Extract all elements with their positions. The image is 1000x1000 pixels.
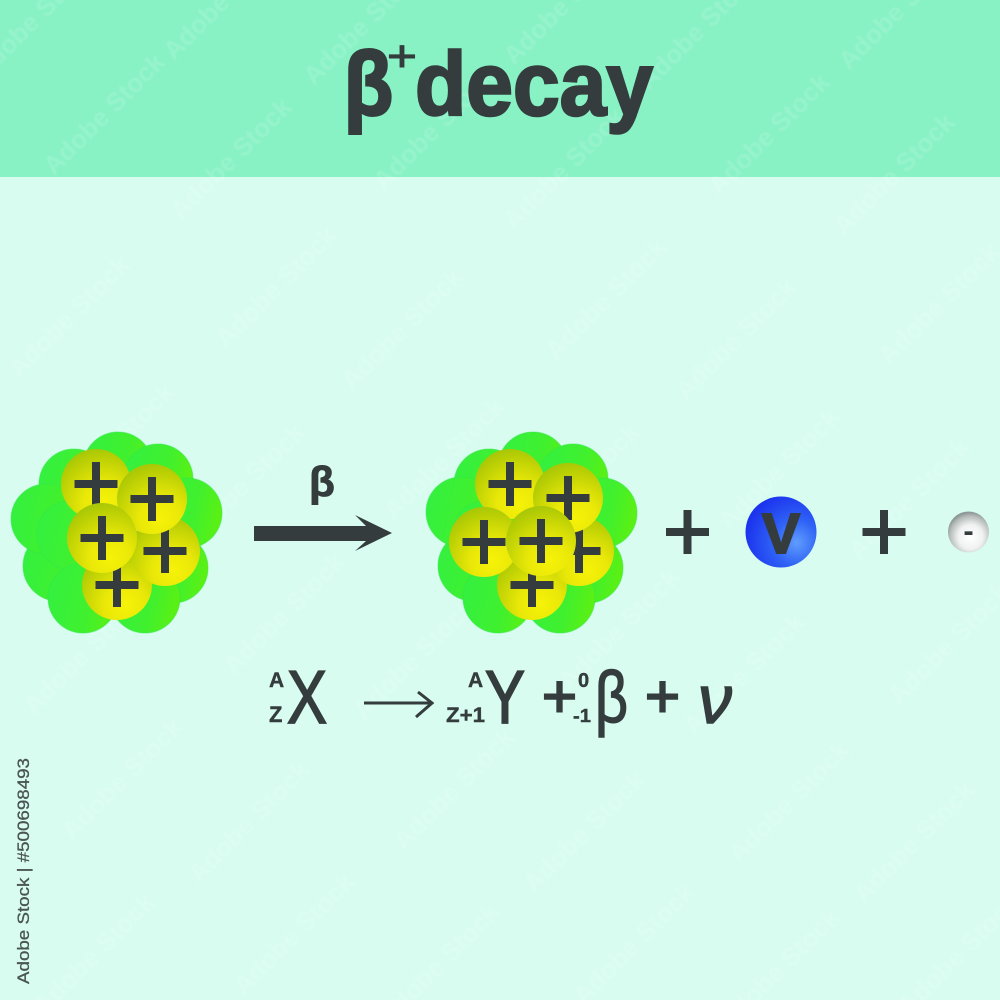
decay equation xyxy=(269,655,732,739)
equation plus 2: + xyxy=(645,663,680,730)
watermarks: Adobe Stock xyxy=(217,546,351,680)
parent atomic number: Z xyxy=(269,702,282,727)
beta charge number: -1 xyxy=(573,706,591,726)
reaction arrow xyxy=(254,515,392,551)
stock id label: Adobe Stock | #500698493 xyxy=(14,758,33,984)
beta symbol: β xyxy=(595,658,628,738)
nucleus: daughter xyxy=(426,432,637,633)
watermarks: Adobe Stock xyxy=(377,391,511,525)
nucleus: parent xyxy=(11,432,222,633)
watermarks: Adobe Stock xyxy=(677,606,811,740)
plus sign 2 xyxy=(862,510,906,554)
beta mass number: 0 xyxy=(578,670,589,692)
title: β xyxy=(344,35,393,135)
equation plus 1: + xyxy=(542,663,577,730)
title: + xyxy=(387,32,417,81)
watermarks: Adobe Stock xyxy=(164,91,298,225)
parent symbol X: X xyxy=(287,655,327,739)
watermarks: Adobe Stock xyxy=(712,401,846,535)
watermarks: Adobe Stock xyxy=(497,101,631,235)
neutrino symbol: ν xyxy=(698,662,732,738)
watermarks: Adobe Stock xyxy=(387,721,521,855)
watermarks: Adobe Stock xyxy=(517,764,651,898)
neutrino particle xyxy=(746,496,816,568)
watermarks: Adobe Stock xyxy=(227,866,361,1000)
positron particle xyxy=(948,512,989,552)
watermarks: Adobe Stock xyxy=(512,416,646,550)
title: decay xyxy=(415,35,653,135)
plus sign 1 xyxy=(666,510,709,554)
watermarks: Adobe Stock xyxy=(722,734,856,868)
watermarks: Adobe Stock xyxy=(847,774,981,908)
watermarks: Adobe Stock xyxy=(182,754,316,888)
watermarks: Adobe Stock xyxy=(669,271,803,405)
watermarks: Adobe Stock xyxy=(552,561,686,695)
beta label: β xyxy=(309,458,335,505)
watermarks: Adobe Stock xyxy=(2,249,136,383)
watermarks: Adobe Stock xyxy=(37,46,171,180)
equation arrow xyxy=(364,692,432,717)
watermarks: Adobe Stock xyxy=(702,66,836,200)
watermarks: Adobe Stock xyxy=(367,61,501,195)
watermarks: Adobe Stock xyxy=(842,431,976,565)
watermarks: Adobe Stock xyxy=(209,219,343,353)
watermarks: Adobe Stock xyxy=(539,231,673,365)
daughter mass number: A xyxy=(468,669,483,692)
watermarks: Adobe Stock xyxy=(827,106,961,240)
watermarks: Adobe Stock xyxy=(347,591,481,725)
daughter symbol Y: Y xyxy=(485,655,525,739)
watermarks: Adobe Stock xyxy=(335,261,469,395)
daughter atomic number: Z+1 xyxy=(446,704,485,727)
neutrino particle: V xyxy=(762,502,800,566)
watermarks: Adobe Stock xyxy=(177,416,311,550)
positron particle: - xyxy=(963,513,974,548)
watermarks: Adobe Stock xyxy=(55,711,189,845)
watermarks: Adobe Stock xyxy=(47,376,181,510)
header band xyxy=(0,0,1000,177)
watermarks: Adobe Stock xyxy=(17,586,151,720)
parent mass number: A xyxy=(269,669,284,692)
